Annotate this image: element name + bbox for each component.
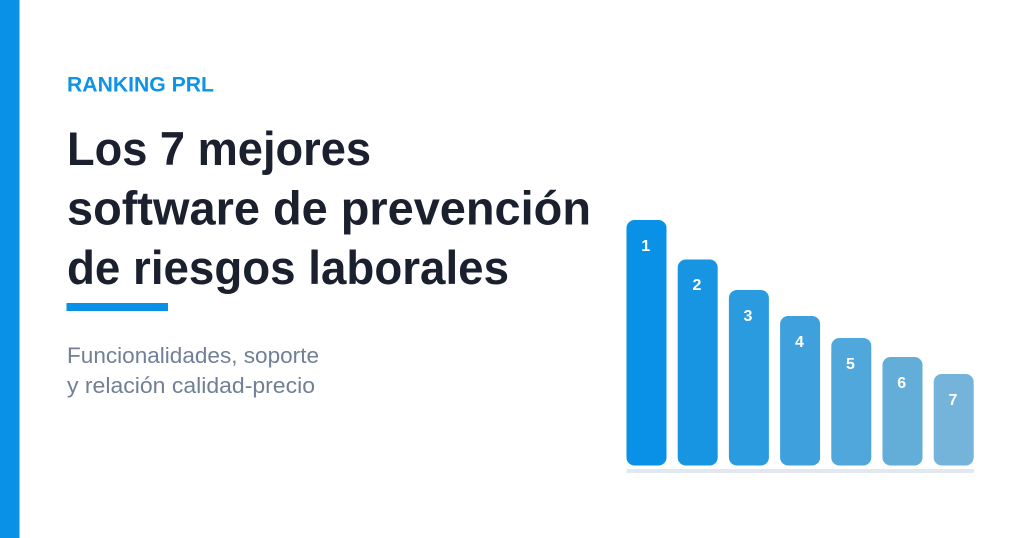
bar 4: 4 [795, 334, 804, 351]
bar 3 [729, 290, 769, 466]
title: Los 7 mejores [67, 122, 371, 175]
subtitle: Funcionalidades, soporte [67, 343, 319, 368]
bar 2: 2 [693, 277, 702, 294]
bar chart [626, 220, 974, 473]
bar 5 [831, 338, 871, 466]
bar 7 [934, 374, 974, 466]
title [67, 122, 591, 294]
bar 6 [882, 357, 922, 466]
subtitle: y relación calidad-precio [67, 373, 315, 398]
bar 1 [626, 220, 666, 466]
bar 5: 5 [846, 356, 855, 373]
title: de riesgos laborales [67, 241, 509, 294]
bar 2 [678, 260, 718, 466]
left accent stripe [0, 0, 20, 538]
eyebrow heading: RANKING PRL [67, 74, 214, 96]
bar 6: 6 [897, 375, 906, 392]
bar 1: 1 [641, 238, 650, 255]
bar 4 [780, 316, 820, 466]
bar 7: 7 [949, 392, 958, 409]
bar 3: 3 [744, 308, 753, 325]
title: software de prevención [67, 182, 591, 234]
subtitle [67, 343, 319, 398]
title underline [66, 303, 168, 311]
chart baseline [626, 469, 974, 473]
